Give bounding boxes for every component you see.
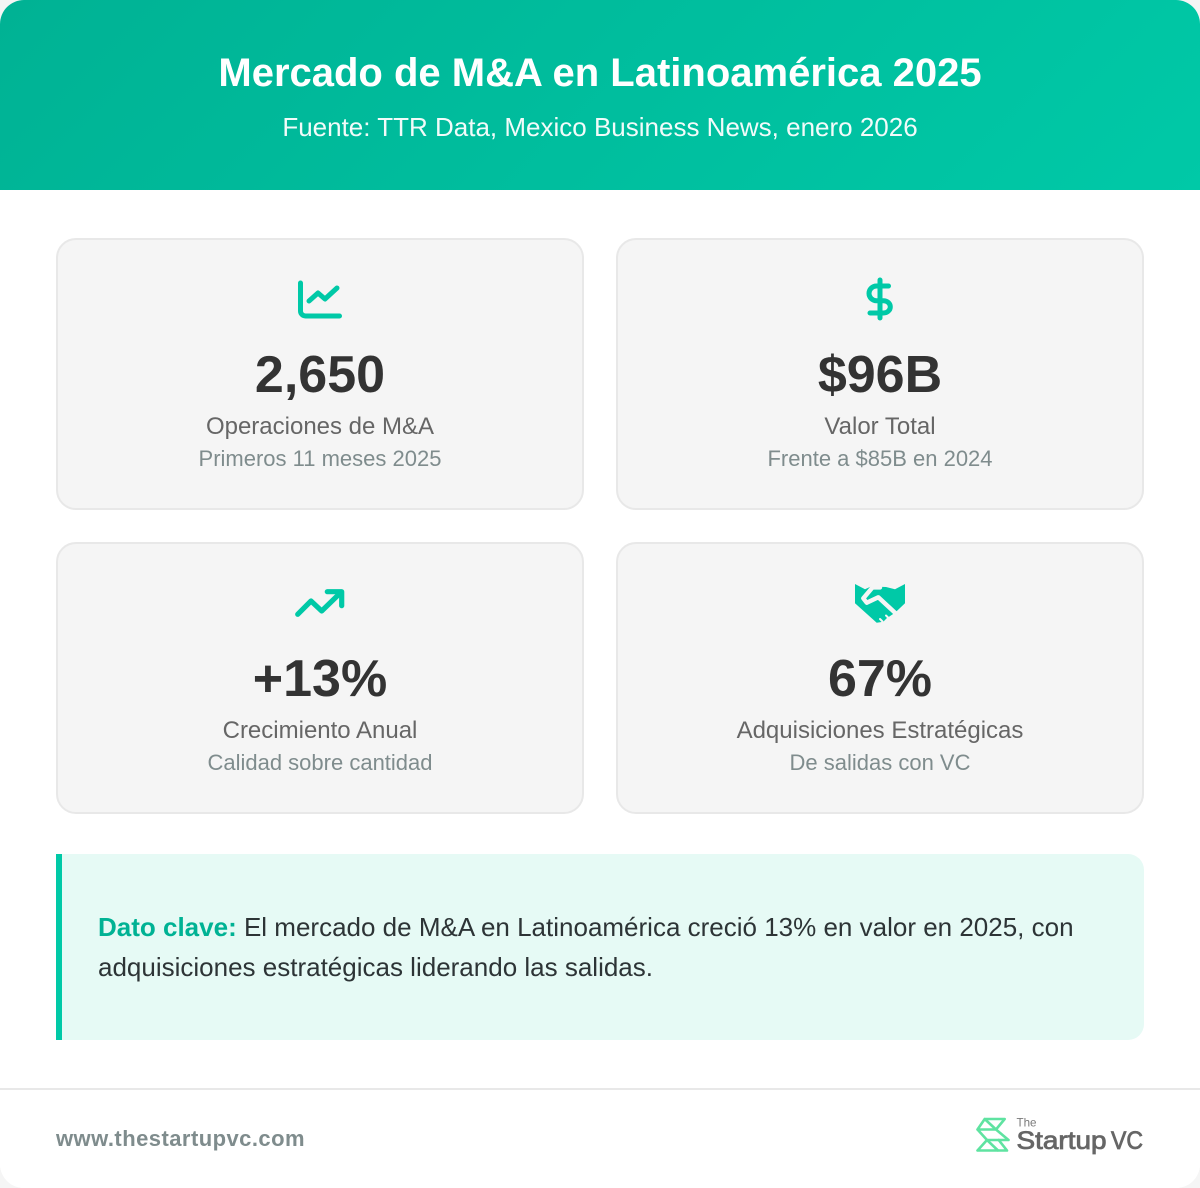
- stat note: De salidas con VC: [790, 750, 970, 775]
- stat number: 2,650: [255, 346, 385, 404]
- logo text: The: The: [1016, 1116, 1037, 1130]
- panel: operaciones de M&A: [56, 238, 584, 510]
- callout text: Dato clave: El mercado de M&A en Latinoamérica creció 13% en valor en 2025, con adquisiciones estratégicas liderando las salidas.: [98, 912, 1074, 982]
- stat number: +13%: [253, 650, 387, 708]
- logo text: Startup VC: [1016, 1127, 1143, 1155]
- stat note: Primeros 11 meses 2025: [199, 446, 441, 471]
- stat note: Calidad sobre cantidad: [207, 750, 433, 775]
- icon: dollar sign: [866, 278, 893, 320]
- logo mark: [978, 1119, 1008, 1150]
- footer: [0, 1088, 1200, 1188]
- stat label: Crecimiento Anual: [223, 717, 417, 744]
- source subtitle: Fuente: TTR Data, Mexico Business News, enero 2026: [282, 112, 918, 142]
- logo text: Startup VC: Startup: [1016, 1127, 1106, 1155]
- icon: line chart: [298, 280, 342, 318]
- stat label: Valor Total: [824, 413, 936, 440]
- panel: valor total: [616, 238, 1144, 510]
- callout: dato clave: [56, 854, 1144, 1040]
- stat number: $96B: [818, 346, 942, 404]
- icon: handshake: [855, 584, 905, 623]
- title: Mercado de M&A en Latinoamérica 2025: [218, 51, 982, 95]
- header banner: [0, 0, 1200, 190]
- stat label: Adquisiciones Estratégicas: [737, 717, 1023, 744]
- website url: www.thestartupvc.com: [56, 1126, 305, 1151]
- stat number: 67%: [828, 650, 932, 708]
- stat label: Operaciones de M&A: [206, 413, 434, 440]
- panel: crecimiento anual: [56, 542, 584, 814]
- logo text: Startup VC: VC: [1111, 1127, 1143, 1155]
- logo: The Startup VC: [976, 1116, 1143, 1155]
- stat note: Frente a $85B en 2024: [767, 446, 993, 471]
- panel: adquisiciones estratégicas: [616, 542, 1144, 814]
- icon: trending up arrow: [295, 589, 344, 617]
